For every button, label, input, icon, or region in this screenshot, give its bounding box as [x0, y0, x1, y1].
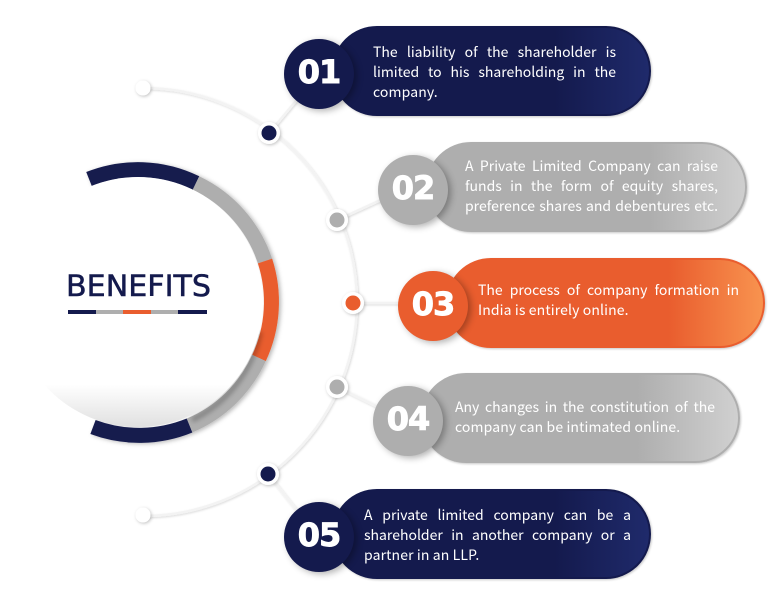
text 05: partner in an LLP.: [364, 545, 479, 565]
text 02: preference shares and debentures etc.: [465, 196, 718, 216]
badge 04: [373, 386, 443, 456]
card 04: [372, 373, 742, 465]
title underline: [68, 310, 207, 314]
text 01: company.: [373, 82, 438, 102]
badge 01: [284, 39, 354, 109]
text 02: A Private Limited Company can raise: [465, 156, 718, 176]
text 03: [478, 280, 739, 320]
text 01: [373, 42, 616, 102]
badge 04: 04: [387, 400, 429, 438]
node 03: [342, 292, 364, 314]
text 05: [364, 505, 631, 565]
text 01: The liability of the shareholder is: [373, 42, 616, 62]
node 04: [326, 376, 348, 398]
text 05: A private limited company can be a: [364, 505, 631, 525]
node 02: [326, 209, 348, 231]
central disc: [13, 177, 263, 427]
badge 02: 02: [392, 169, 434, 207]
badge 03: 03: [412, 285, 454, 323]
card 03: [397, 258, 767, 350]
text 01: limited to his shareholding in the: [373, 62, 616, 82]
card 05: [283, 489, 653, 581]
text 04: [455, 397, 715, 437]
disc shadow on ring: [192, 332, 260, 420]
card 02: [377, 142, 749, 234]
text 03: India is entirely online.: [478, 300, 629, 320]
pill 01: [332, 26, 651, 116]
end dot top: [136, 80, 150, 96]
node 01: [258, 122, 280, 144]
text 03: The process of company formation in: [478, 280, 739, 300]
central ring: [89, 170, 271, 435]
badge 05: 05: [298, 516, 340, 554]
text 04: Any changes in the constitution of the: [455, 397, 715, 417]
badge 03: [398, 271, 468, 341]
text 04: company can be intimated online.: [455, 417, 680, 437]
title: BENEFITS: [66, 269, 211, 303]
pill 04: [421, 373, 740, 463]
badge 02: [378, 155, 448, 225]
text 02: [465, 156, 718, 216]
text 02: funds in the form of equity shares,: [465, 176, 718, 196]
pill 03: [446, 258, 765, 348]
text 05: shareholder in another company or a: [364, 525, 631, 545]
card 01: [283, 26, 653, 118]
pill 05: [332, 489, 651, 579]
node 05: [257, 463, 279, 485]
badge 05: [284, 502, 354, 572]
badge 01: 01: [298, 53, 340, 91]
pill 02: [426, 142, 747, 232]
end dot bottom: [136, 508, 150, 522]
